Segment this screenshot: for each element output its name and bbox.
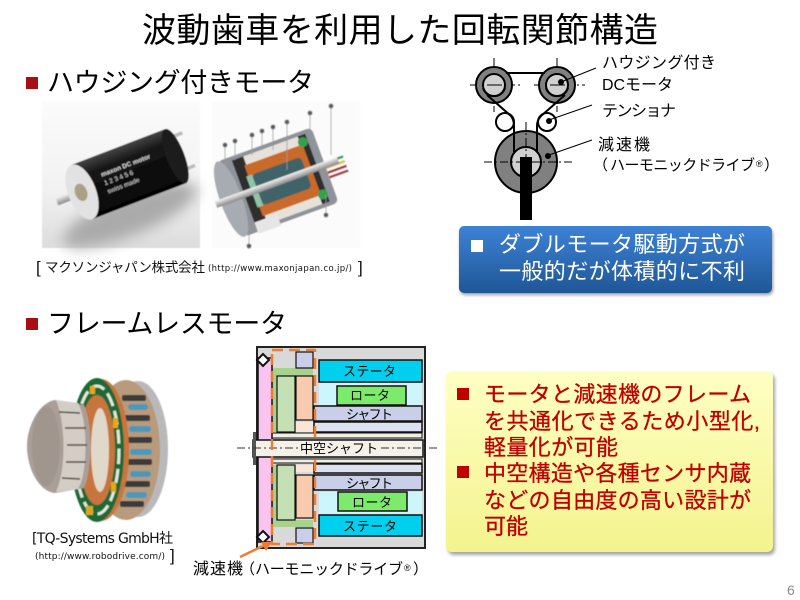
diagram: double motor drive [470,58,596,220]
part labels: ステータ [343,364,396,379]
callout: blue [459,226,773,295]
part labels: ステータ [343,519,397,534]
source: maxon japan: マクソンジャパン株式会社 [45,260,206,275]
orange dashed reducer outline [272,350,315,544]
part labels: シャフト [346,476,393,491]
diagram labels: top [593,54,779,174]
source: maxon japan: ] [358,258,363,277]
diagram: frameless motor cross-section [237,347,437,557]
motor label text: 1 2 3 4 5 6 [103,169,135,187]
heading: frameless motor: フレームレスモータ [47,309,287,339]
diagram labels: top: （ [593,157,608,174]
diagram labels: top: テンショナ [602,103,676,120]
diagram labels: top: 減速機 [598,136,650,154]
diagram labels: top: ハーモニックドライブ [610,156,755,174]
photo: maxon DC motor [42,101,204,261]
motor right [539,67,575,103]
callout: yellow: などの自由度の高い設計が [484,488,751,513]
photo: motor cutaway [202,101,360,248]
callout: yellow [446,371,775,555]
diamonds [257,354,269,543]
diagram labels: top: DCモータ [602,76,673,94]
center line [237,447,437,449]
part labels [298,364,397,534]
source: TQ-Systems [32,531,175,565]
reducer [495,131,557,193]
diagram labels: top: ） [764,157,779,174]
tensioners [496,113,556,131]
part labels: ロータ [352,495,392,510]
source: TQ-Systems: (http://www.robodrive.com/) [35,552,165,562]
part labels: ロータ [350,388,390,403]
heading: housed motor: ハウジング付きモータ [47,68,314,98]
label: harmonic drive: （ [240,561,255,578]
label: harmonic drive: ハーモニックドライブ [255,560,403,578]
photo: frameless ring motor [27,378,168,522]
label: harmonic drive: 減速機 [193,560,243,578]
callout: yellow: 可能 [484,514,528,539]
source: maxon japan: (http://www.maxonjapan.co.jp/) [208,264,352,274]
arrow [240,542,272,557]
stators, rotors, shafts [314,360,422,536]
belt [487,73,565,152]
part labels: 中空シャフト [300,441,378,456]
motor label text [100,153,158,196]
source: TQ-Systems: [TQ-Systems GmbH社 [32,531,173,547]
source: maxon japan [36,258,363,277]
motor label text: swiss made [107,177,141,196]
center lines [470,58,585,112]
motor left [476,67,512,103]
callout: blue: ダブルモータ駆動方式が [499,232,745,257]
callout: yellow: を共通化できるため小型化, [484,409,760,434]
part labels: シャフト [346,407,393,422]
callout: yellow: 軽量化が可能 [484,435,618,460]
source: TQ-Systems: ] [170,546,175,565]
output link [520,157,532,220]
callout: yellow: モータと減速機のフレーム [484,382,751,407]
reducer parts [272,352,313,543]
hollow shaft [253,440,423,457]
callout markers [223,104,333,248]
title: 波動歯車を利用した回転関節構造 [142,12,658,50]
callout: yellow: 中空構造や各種センサ内蔵 [484,461,751,486]
page number: 6 [787,582,795,598]
diagram labels: top: ハウジング付き [602,54,716,72]
label: harmonic drive [193,560,428,578]
pink output flange [258,358,272,542]
housing [257,347,425,548]
callout: blue: 一般的だが体積的に不利 [499,259,745,284]
motor label text: maxon DC motor [100,153,152,179]
leaders [549,68,596,155]
diagram labels: top: ® [756,159,763,169]
shaft strips [272,433,422,438]
label: harmonic drive: ） [413,561,428,578]
source: maxon japan: [ [36,258,41,277]
label: harmonic drive: ® [404,563,411,573]
